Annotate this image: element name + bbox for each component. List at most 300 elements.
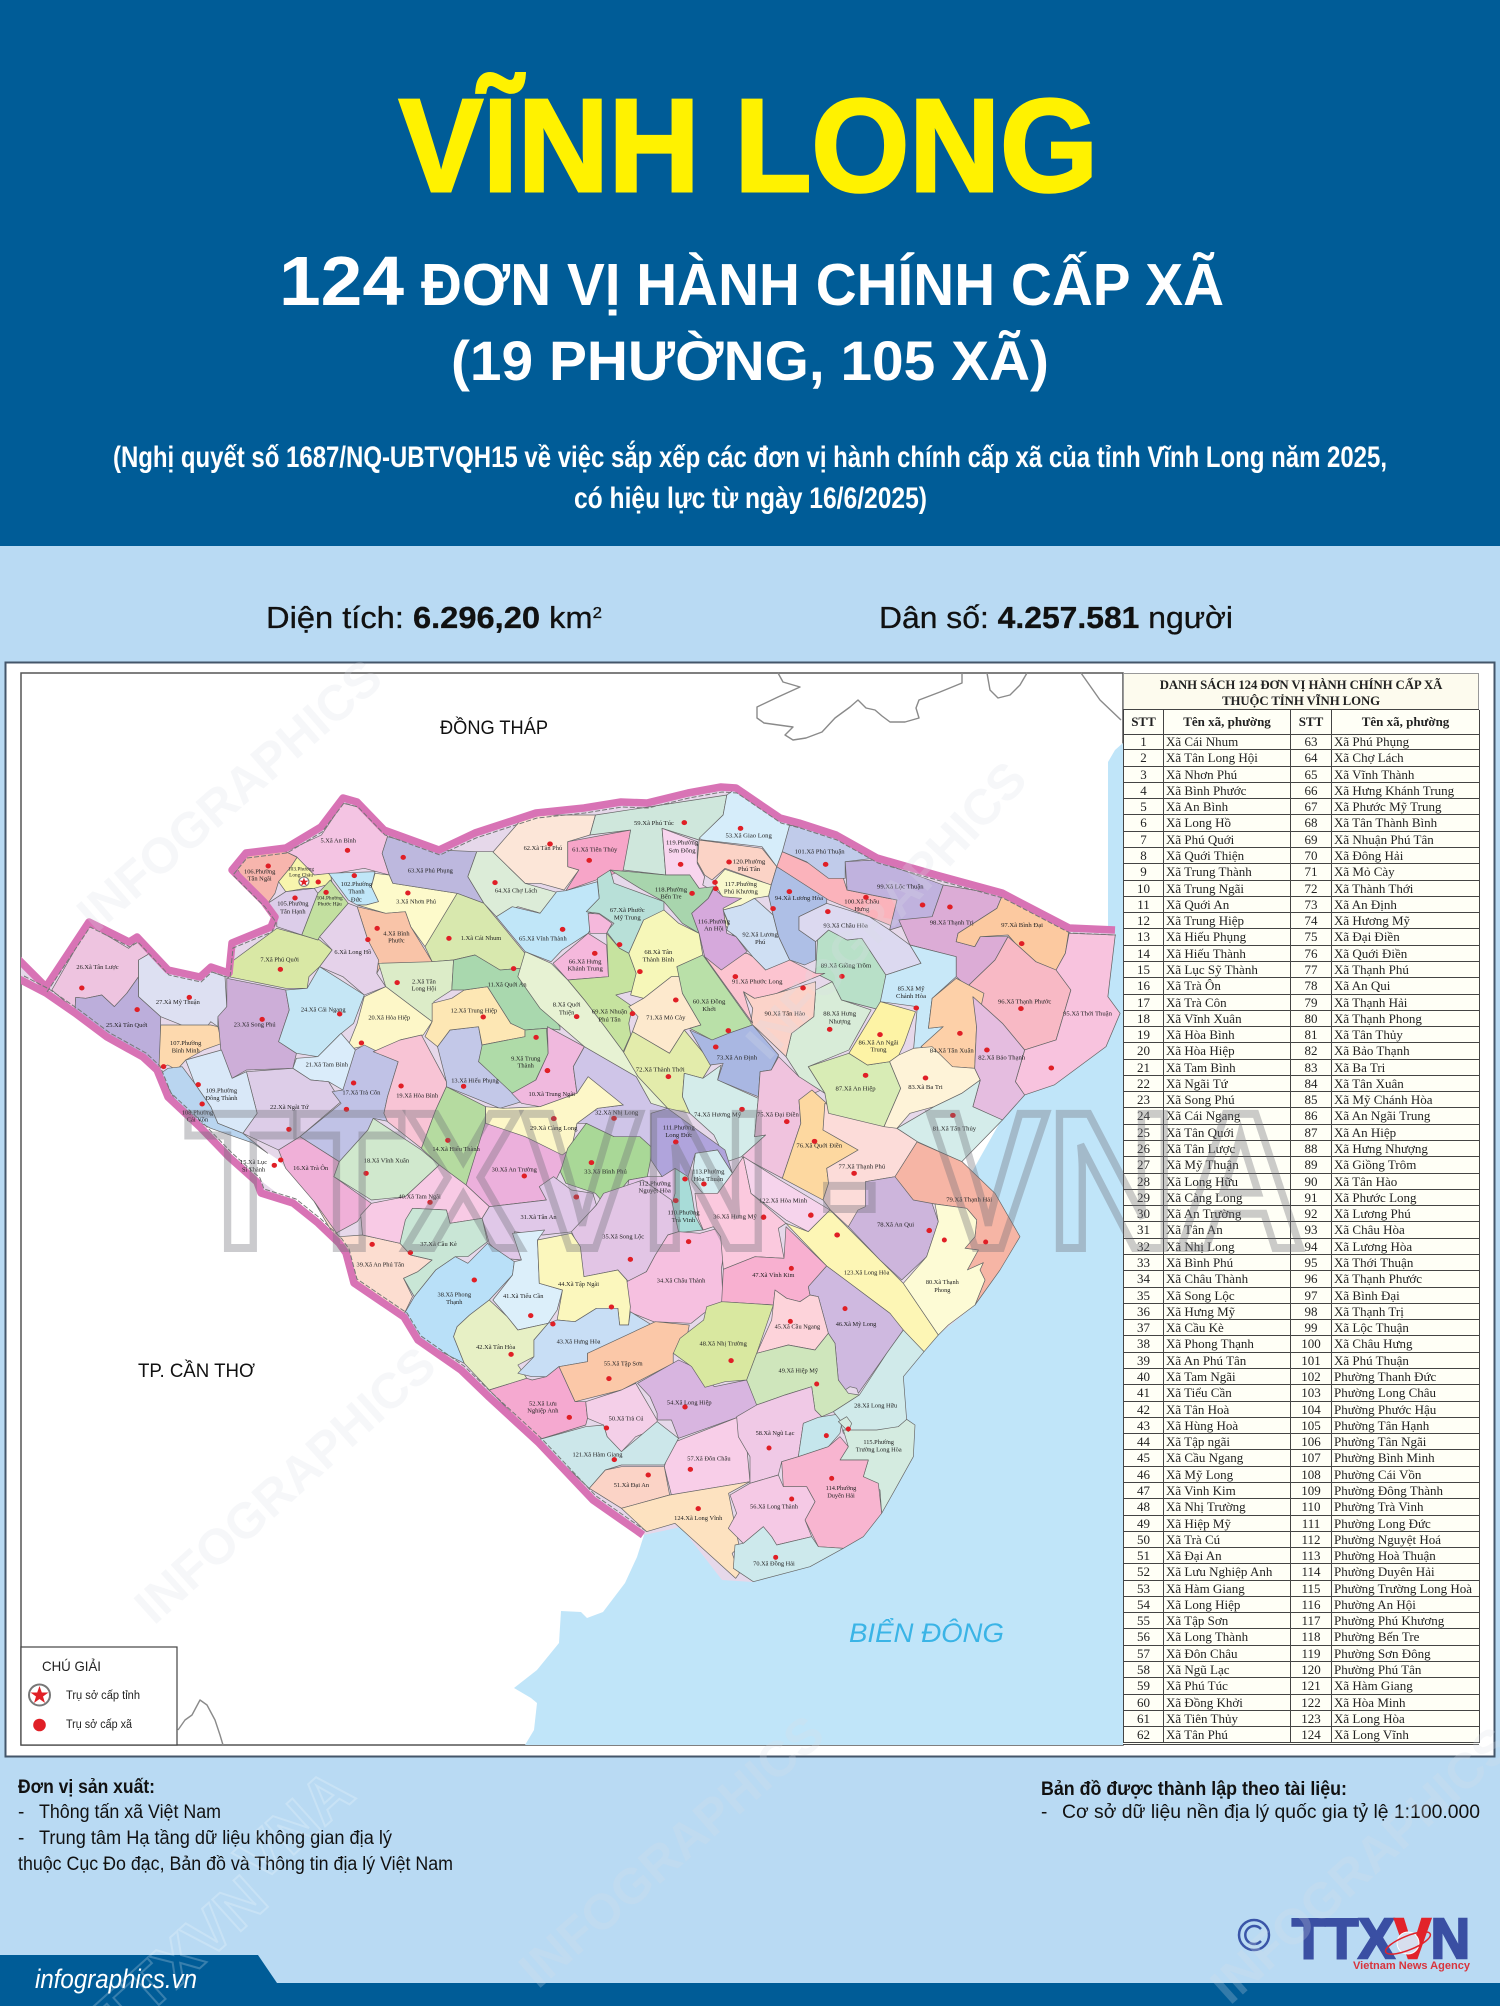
table rows: Xã Tân Long Hội — [1166, 750, 1258, 765]
table rows: Xã Tiên Thủy — [1166, 1711, 1238, 1726]
labels and seats: north and centre: Bến Tre — [660, 894, 682, 901]
table rows: Phường Thanh Đức — [1334, 1369, 1436, 1384]
communes: north and centre — [486, 788, 1120, 1233]
table rows: 66 — [1304, 783, 1318, 798]
legend — [21, 1647, 177, 1745]
labels and seats: west: 1.Xã Cái Nhum — [461, 935, 501, 942]
labels and seats: north and centre: 88.Xã Hưng — [823, 1011, 857, 1018]
table rows: 84 — [1304, 1076, 1318, 1091]
labels and seats: north and centre: 99.Xã Lộc Thuận — [877, 884, 925, 890]
watermark: infographics: INFOGRAPHICS — [124, 1336, 446, 1634]
table rows: Xã Lưu Nghiệp Anh — [1166, 1564, 1272, 1579]
labels and seats: north and centre: 110.Phường — [667, 1210, 701, 1217]
table rows: Xã Lộc Thuận — [1334, 1320, 1409, 1335]
table rows: 97 — [1304, 1288, 1318, 1303]
labels and seats: west: 5.Xã An Bình — [320, 838, 357, 844]
labels and seats: north and centre: 116.Phường — [698, 919, 731, 925]
labels and seats: north and centre: Hưng — [854, 906, 870, 913]
labels and seats: west: 22.Xã Ngãi Tứ — [270, 1104, 309, 1111]
labels and seats: west: 40.Xã Tam Ngãi — [398, 1194, 441, 1201]
table rows: 25 — [1137, 1125, 1150, 1140]
table rows: Xã Tam Bình — [1166, 1060, 1236, 1075]
labels and seats: north and centre: Sơn Đông — [669, 848, 696, 854]
table rows: 96 — [1304, 1271, 1318, 1286]
table rows: 88 — [1304, 1141, 1318, 1156]
table rows: 114 — [1301, 1564, 1321, 1579]
table rows: Xã Hiệp Mỹ — [1166, 1516, 1231, 1530]
labels and seats: west: Tân Hạnh — [280, 909, 307, 915]
table rows: Xã Vĩnh Thành — [1334, 767, 1414, 782]
table rows: Phường Nguyệt Hoá — [1334, 1532, 1441, 1547]
communes: south-west — [314, 1165, 760, 1578]
table rows: 20 — [1137, 1043, 1150, 1058]
table rows: 95 — [1304, 1255, 1318, 1270]
labels and seats: north and centre: 97.Xã Bình Đại — [1001, 922, 1043, 929]
labels and seats: west: 12.Xã Trung Hiệp — [451, 1008, 497, 1015]
labels and seats: south-west: 44.Xã Tập Ngãi — [558, 1281, 599, 1288]
labels and seats: north and centre: 8.Xã Quới — [553, 1002, 581, 1009]
table rows: Xã Hòa Minh — [1334, 1695, 1406, 1710]
labels and seats: west: Long Châu — [289, 873, 313, 879]
labels and seats: north and centre: 74.Xã Hương Mỹ — [694, 1112, 742, 1119]
table: list of 124 communes and wards — [1123, 673, 1479, 1744]
table rows: Xã Cầu Kè — [1166, 1320, 1224, 1335]
labels and seats: south-east: 46.Xã Mỹ Long — [836, 1321, 877, 1328]
table title: DANH SÁCH 124 ĐƠN VỊ HÀNH CHÍNH CẤP XÃ — [1160, 678, 1442, 692]
table rows: Phường Phú Khương — [1334, 1613, 1444, 1628]
labels and seats: north and centre: 90.Xã Tân Hào — [765, 1011, 805, 1018]
labels and seats: south-west: 48.Xã Nhị Trường — [700, 1341, 747, 1347]
labels and seats: north and centre: Khởi — [702, 1006, 716, 1013]
table rows: Xã Lương Hòa — [1334, 1239, 1412, 1254]
logo: TTXVN: TTXVN — [1292, 1907, 1470, 1971]
table rows: 38 — [1137, 1336, 1150, 1351]
table rows: 34 — [1137, 1271, 1150, 1286]
labels and seats: south-east: Phong — [934, 1287, 951, 1294]
labels and seats: south-west: 37.Xã Cầu Kè — [420, 1241, 457, 1248]
labels and seats: west: 23.Xã Song Phú — [234, 1022, 276, 1029]
table rows: 57 — [1137, 1646, 1150, 1661]
table rows: 117 — [1301, 1613, 1321, 1628]
table rows: 44 — [1137, 1434, 1150, 1449]
table rows: Xã Hàm Giang — [1166, 1581, 1245, 1596]
table rows: 81 — [1304, 1027, 1318, 1042]
labels and seats: north and centre: Phú Tân — [598, 1017, 622, 1023]
table rows: Xã Vĩnh Xuân — [1166, 1011, 1242, 1026]
table rows: 70 — [1304, 848, 1318, 863]
table rows: 28 — [1137, 1174, 1150, 1189]
table rows: 50 — [1137, 1532, 1150, 1547]
icon: copyright — [1239, 1920, 1269, 1950]
credits: source — [1041, 1779, 1480, 1823]
labels and seats: south-west: 35.Xã Song Lộc — [602, 1234, 644, 1240]
labels and seats: west: Thành — [518, 1063, 535, 1070]
credits: producer: Đơn vị sản xuất: — [18, 1777, 155, 1798]
table rows: Xã Tiểu Cần — [1166, 1385, 1232, 1400]
table rows: Xã Ngũ Lạc — [1166, 1662, 1230, 1677]
table rows: Xã Phước Long — [1334, 1190, 1417, 1205]
table rows: 122 — [1301, 1695, 1321, 1710]
labels and seats: west: 64.Xã Chợ Lách — [495, 888, 538, 894]
table rows: 92 — [1304, 1206, 1318, 1221]
labels and seats: south-west: 38.Xã Phong — [438, 1292, 471, 1298]
table rows: 119 — [1301, 1646, 1321, 1661]
table rows: Xã Nhuận Phú Tân — [1334, 832, 1434, 847]
table rows: Xã Hòa Hiệp — [1166, 1043, 1235, 1058]
table rows: 73 — [1304, 897, 1318, 912]
table rows: Phường Long Châu — [1334, 1385, 1436, 1400]
labels and seats: west: 13.Xã Hiếu Phụng — [451, 1078, 499, 1085]
labels and seats: west: Phước — [388, 938, 405, 945]
table title — [1123, 673, 1479, 709]
labels and seats: north and centre: 77.Xã Thạnh Phú — [839, 1164, 886, 1171]
table rows: 65 — [1304, 767, 1318, 782]
table rows: 98 — [1304, 1304, 1318, 1319]
table rows: 8 — [1140, 848, 1147, 863]
credits: source: Bản đồ được thành lập theo tài liệu: — [1041, 1779, 1347, 1800]
table rows: 7 — [1140, 832, 1147, 847]
labels and seats: south-west: Thạnh — [446, 1299, 463, 1306]
table rows: Xã Mỹ Thuận — [1166, 1157, 1239, 1172]
table rows: Xã Hiếu Thành — [1166, 946, 1246, 961]
labels and seats: north and centre: 92.Xã Lương — [742, 932, 779, 939]
labels and seats: south-east: 80.Xã Thạnh — [926, 1279, 960, 1286]
labels and seats: south-east: 114.Phường — [826, 1485, 857, 1492]
table rows: Phường Phước Hậu — [1334, 1402, 1436, 1417]
labels and seats: north and centre: 75.Xã Đại Điền — [757, 1112, 800, 1118]
labels and seats: north and centre: 119.Phường — [666, 840, 699, 847]
heading: 124 units — [279, 242, 1224, 320]
table rows: Xã Chợ Lách — [1334, 750, 1404, 765]
labels and seats: south-east: 49.Xã Hiệp Mỹ — [779, 1368, 819, 1375]
labels and seats: south-west: 31.Xã Tân An — [521, 1214, 557, 1221]
table rows: 36 — [1137, 1304, 1150, 1319]
table rows: Xã Tân Thành Bình — [1334, 815, 1437, 830]
labels and seats: west: 62.Xã Tân Phú — [524, 845, 562, 852]
table rows: 59 — [1137, 1678, 1150, 1693]
labels and seats: west: 21.Xã Tam Bình — [306, 1062, 349, 1069]
labels and seats: west: 108.Phường — [182, 1110, 213, 1116]
table rows: 13 — [1137, 929, 1150, 944]
labels and seats: south-east: 58.Xã Ngũ Lạc — [756, 1430, 795, 1437]
table rows: 31 — [1137, 1222, 1150, 1237]
table rows: Xã Thới Thuận — [1334, 1255, 1413, 1270]
table rows: 10 — [1137, 881, 1150, 896]
table rows: Phường Duyên Hải — [1334, 1564, 1435, 1579]
map labels: neighbouring areas — [138, 717, 548, 1382]
labels and seats: south-west: 54.Xã Long Hiệp — [667, 1400, 712, 1406]
labels and seats: north and centre: 82.Xã Bảo Thạnh — [978, 1055, 1026, 1061]
labels and seats: west: 15.Xã Lục — [240, 1159, 267, 1166]
table rows: 6 — [1140, 815, 1147, 830]
labels and seats: west: 10.Xã Trung Ngãi — [529, 1091, 575, 1098]
labels and seats: north and centre: 33.Xã Bình Phú — [584, 1169, 628, 1175]
table rows: 37 — [1137, 1320, 1150, 1335]
table rows: Phường Tân Ngãi — [1334, 1434, 1426, 1449]
table rows: 75 — [1304, 929, 1318, 944]
labels and seats: west: 2.Xã Tân — [412, 979, 436, 985]
labels and seats: north and centre: Nhượng — [829, 1019, 851, 1025]
table rows: 105 — [1301, 1418, 1321, 1433]
table rows: Xã An Qui — [1334, 978, 1390, 993]
table rows: Xã Giồng Trôm — [1334, 1157, 1416, 1172]
labels and seats: north and centre: 36.Xã Hưng Mỹ — [713, 1214, 758, 1220]
table rows: Xã Châu Thành — [1166, 1271, 1248, 1286]
labels and seats: west: 14.Xã Hiếu Thành — [432, 1146, 481, 1153]
labels and seats: north and centre: Nguyệt Hòa — [639, 1188, 671, 1195]
labels and seats: west: 25.Xã Tân Quới — [106, 1022, 148, 1029]
table rows: Xã Quới Thiện — [1166, 848, 1244, 863]
table rows: 86 — [1304, 1108, 1318, 1123]
table rows: Xã Ngãi Tứ — [1166, 1076, 1228, 1091]
table rows: 58 — [1137, 1662, 1150, 1677]
table rows: Xã Phong Thạnh — [1166, 1336, 1254, 1351]
table rows: Xã Bình Phú — [1166, 1255, 1233, 1270]
table rows: Xã Phước Mỹ Trung — [1334, 799, 1441, 814]
map inner frame — [21, 673, 1123, 1745]
province border — [10, 787, 1116, 1535]
table rows: 21 — [1137, 1060, 1150, 1075]
labels and seats: north and centre: 29.Xã Càng Long — [530, 1125, 578, 1132]
labels and seats: north and centre: 76.Xã Quới Điền — [796, 1143, 843, 1150]
table rows: Xã An Ngãi Trung — [1334, 1108, 1430, 1123]
labels and seats: north and centre: 83.Xã Ba Tri — [908, 1084, 943, 1091]
title: VĨNH LONG — [399, 72, 1098, 219]
footer bar — [0, 1955, 1500, 2006]
province land base — [21, 787, 1120, 1582]
table rows: Phường Phú Tân — [1334, 1662, 1421, 1677]
labels and seats: north and centre: 94.Xã Lương Hòa — [775, 895, 823, 902]
labels and seats: south-east: 47.Xã Vĩnh Kim — [752, 1272, 795, 1279]
table rows: 101 — [1301, 1353, 1321, 1368]
table rows: Xã Mỏ Cày — [1334, 864, 1395, 879]
table rows: 109 — [1301, 1483, 1321, 1498]
map labels: neighbouring areas: ĐỒNG THÁP — [440, 717, 548, 739]
table rows: Xã Thạnh Phong — [1334, 1011, 1422, 1026]
table rows: 116 — [1301, 1597, 1321, 1612]
table rows: Xã Quới An — [1166, 897, 1229, 912]
labels and seats: north and centre: Mỹ Trung — [614, 915, 642, 921]
table rows: Xã Trung Thành — [1166, 864, 1252, 879]
table rows: 83 — [1304, 1060, 1318, 1075]
table rows: 4 — [1140, 783, 1147, 798]
table rows: 64 — [1304, 750, 1318, 765]
table rows: Phường Tân Hạnh — [1334, 1418, 1429, 1433]
table rows: Xã Cái Ngang — [1166, 1108, 1240, 1123]
table rows: Xã Hiếu Phụng — [1166, 929, 1246, 944]
table rows: 102 — [1301, 1369, 1321, 1384]
logo: TTXVN: Vietnam News Agency — [1353, 1960, 1471, 1972]
table rows: 77 — [1304, 962, 1318, 977]
labels and seats: west: 103.Phường — [288, 867, 315, 873]
table rows: Xã Tân Hào — [1334, 1174, 1397, 1189]
table rows: Xã Tân Quới — [1166, 1125, 1234, 1140]
table rows: 39 — [1137, 1353, 1150, 1368]
labels and seats: north and centre: An Hội — [704, 926, 724, 933]
table rows: 11 — [1137, 897, 1150, 912]
table rows: Xã Bình Phước — [1166, 783, 1246, 798]
table rows: Xã Tân Xuân — [1334, 1076, 1404, 1091]
table rows: 82 — [1304, 1043, 1318, 1058]
table rows: 46 — [1137, 1467, 1150, 1482]
labels and seats: south-east: Trường Long Hòa — [856, 1447, 902, 1454]
table header row: Tên xã, phường — [1362, 714, 1449, 729]
labels and seats: west: 27.Xã Mỹ Thuận — [156, 999, 200, 1006]
table rows: Xã Phú Thuận — [1334, 1353, 1409, 1368]
table rows: 79 — [1304, 994, 1318, 1010]
table rows: Phường Bình Minh — [1334, 1450, 1435, 1465]
table rows: Phường Hoà Thuận — [1334, 1548, 1436, 1563]
watermark: infographics: INFOGRAPHICS — [66, 649, 393, 942]
table rows: 110 — [1301, 1499, 1321, 1514]
table rows: Xã Hưng Mỹ — [1166, 1304, 1235, 1319]
table rows: 91 — [1304, 1190, 1318, 1205]
table rows: Xã Thạnh Phú — [1334, 962, 1409, 977]
table rows: 112 — [1301, 1532, 1321, 1547]
labels and seats: west: Thanh — [348, 889, 366, 895]
table rows: Xã Long Hữu — [1166, 1174, 1238, 1189]
labels and seats: north and centre: 60.Xã Đồng — [693, 999, 726, 1005]
labels and seats: north and centre: 81.Xã Tân Thủy — [933, 1126, 977, 1133]
table rows: 22 — [1137, 1076, 1150, 1091]
labels and seats: north and centre: 72.Xã Thành Thới — [636, 1067, 685, 1073]
labels and seats: south-east: 28.Xã Long Hữu — [854, 1403, 898, 1410]
labels and seats: north and centre: 87.Xã An Hiệp — [836, 1086, 876, 1093]
labels and seats: south-west: 52.Xã Lưu — [529, 1401, 557, 1407]
labels and seats: west: 65.Xã Vĩnh Thành — [519, 936, 568, 942]
credits: producer: Trung tâm Hạ tầng dữ liệu không gian địa lý — [39, 1828, 392, 1849]
labels and seats: west: 26.Xã Tân Lược — [76, 964, 119, 971]
labels and seats: north and centre: 111.Phường — [663, 1125, 696, 1132]
table rows: Xã Tập ngãi — [1166, 1434, 1230, 1449]
labels and seats: west: 20.Xã Hòa Hiệp — [368, 1015, 410, 1021]
labels and seats: north and centre: 112.Phường — [639, 1181, 672, 1187]
labels and seats: north and centre: Phú — [755, 939, 766, 946]
labels and seats: north and centre: 118.Phường — [655, 887, 688, 893]
table rows: 27 — [1137, 1157, 1150, 1172]
labels and seats: north and centre: 100.Xã Châu — [844, 899, 880, 905]
table rows: Xã Lương Phú — [1334, 1206, 1411, 1221]
labels and seats: north and centre — [530, 820, 1113, 1235]
table rows: 89 — [1304, 1157, 1318, 1172]
table rows: 15 — [1137, 962, 1150, 977]
table rows: 111 — [1302, 1516, 1320, 1530]
map panel outer frame — [6, 662, 1494, 1756]
communes: west — [52, 803, 571, 1240]
table rows: Xã Mỹ Chánh Hòa — [1334, 1092, 1433, 1107]
heading: wards and communes: (19 PHƯỜNG, 105 XÃ) — [451, 329, 1049, 392]
table rows: Xã Long Hòa — [1334, 1711, 1405, 1726]
labels and seats: west: 109.Phường — [206, 1088, 237, 1095]
table rows: 93 — [1304, 1222, 1318, 1237]
labels and seats: west: 106.Phường — [244, 869, 275, 875]
labels and seats: north and centre: 96.Xã Thạnh Phước — [998, 999, 1052, 1006]
table rows: 63 — [1304, 734, 1318, 749]
table rows: Xã Đại An — [1166, 1548, 1222, 1563]
labels and seats: north and centre: 91.Xã Phước Long — [732, 979, 783, 985]
labels and seats: north and centre: 68.Xã Tân — [644, 949, 673, 956]
table rows: 123 — [1301, 1711, 1321, 1726]
table rows: Xã Nhơn Phú — [1166, 767, 1237, 782]
table rows: Xã Nhị Trường — [1166, 1499, 1246, 1514]
table rows: Xã Phú Phụng — [1334, 734, 1409, 749]
table rows: 1 — [1140, 734, 1147, 749]
table rows: Xã Phú Túc — [1166, 1678, 1228, 1693]
table rows: Phường An Hội — [1334, 1597, 1416, 1612]
table rows: 61 — [1137, 1711, 1150, 1726]
labels and seats: west: Bình Minh — [172, 1048, 201, 1054]
table rows: 41 — [1137, 1385, 1150, 1400]
labels and seats: west — [76, 838, 575, 1202]
table rows: 87 — [1304, 1125, 1318, 1140]
labels and seats: south-west: 43.Xã Hưng Hòa — [557, 1339, 601, 1346]
table rows: Xã An Định — [1334, 897, 1397, 912]
table rows: Xã Tân An — [1166, 1222, 1223, 1237]
table rows: 23 — [1137, 1092, 1150, 1107]
table rows: 120 — [1301, 1662, 1321, 1677]
table rows: Xã Hòa Bình — [1166, 1027, 1235, 1042]
labels and seats: south-west: 121.Xã Hàm Giang — [572, 1452, 623, 1458]
table rows: Xã An Phú Tân — [1166, 1353, 1246, 1368]
table rows: 90 — [1304, 1174, 1318, 1189]
labels and seats: south-west: 41.Xã Tiểu Cần — [503, 1293, 543, 1300]
labels and seats: north and centre: 113.Phường — [692, 1169, 725, 1176]
table rows: Xã An Bình — [1166, 799, 1228, 814]
table rows: Xã Trà Côn — [1166, 994, 1227, 1010]
table rows: 76 — [1304, 946, 1318, 961]
table rows: 3 — [1140, 767, 1147, 782]
table rows: 72 — [1304, 881, 1318, 896]
subtitle: resolution: có hiệu lực từ ngày 16/6/2025) — [574, 482, 927, 515]
labels and seats: north and centre: 59.Xã Phú Túc — [634, 820, 674, 827]
credits: producer: - — [18, 1828, 24, 1849]
labels and seats: north and centre: Trung — [870, 1047, 887, 1054]
table rows: Xã Đồng Khởi — [1166, 1695, 1243, 1710]
table title: THUỘC TỈNH VĨNH LONG — [1222, 694, 1380, 708]
table rows: 55 — [1137, 1613, 1150, 1628]
labels and seats: north and centre: Long Đức — [665, 1132, 692, 1139]
table rows: Xã Bảo Thạnh — [1334, 1043, 1410, 1058]
subtitle: resolution — [113, 440, 1387, 515]
labels and seats: south-west: 57.Xã Đôn Châu — [687, 1456, 731, 1462]
table rows: Xã Bình Đại — [1334, 1288, 1400, 1303]
labels and seats: south-east: 45.Xã Cầu Ngang — [775, 1324, 821, 1331]
labels and seats: west: 17.Xã Trà Côn — [342, 1090, 380, 1096]
table rows: Xã Song Lộc — [1166, 1288, 1235, 1303]
table rows: 32 — [1137, 1239, 1150, 1254]
labels and seats: west: 30.Xã An Trường — [492, 1167, 537, 1173]
labels and seats: north and centre: Phú Khương — [724, 889, 759, 895]
labels and seats: west: 6.Xã Long Hồ — [334, 949, 371, 956]
table rows: Xã Tập Sơn — [1166, 1613, 1228, 1628]
labels and seats: north and centre: Thành Bình — [643, 957, 675, 964]
table rows: 33 — [1137, 1255, 1150, 1270]
table rows: 26 — [1137, 1141, 1150, 1156]
labels and seats: north and centre: 53.Xã Giao Long — [725, 833, 773, 840]
table rows: 48 — [1137, 1499, 1150, 1514]
labels and seats: north and centre: 67.Xã Phước — [610, 907, 645, 914]
table rows: 67 — [1304, 799, 1318, 814]
table rows: 43 — [1137, 1418, 1150, 1433]
credits: producer — [18, 1777, 453, 1875]
table rows: Xã An Trường — [1166, 1206, 1241, 1221]
table rows: 124 — [1301, 1727, 1321, 1742]
labels and seats: west: 107.Phường — [170, 1040, 201, 1047]
watermark: infographics: INFOGRAPHICS — [508, 1705, 835, 1998]
table rows: Xã Trung Ngãi — [1166, 881, 1244, 896]
table rows: 103 — [1301, 1385, 1321, 1400]
table rows: 40 — [1137, 1369, 1150, 1384]
